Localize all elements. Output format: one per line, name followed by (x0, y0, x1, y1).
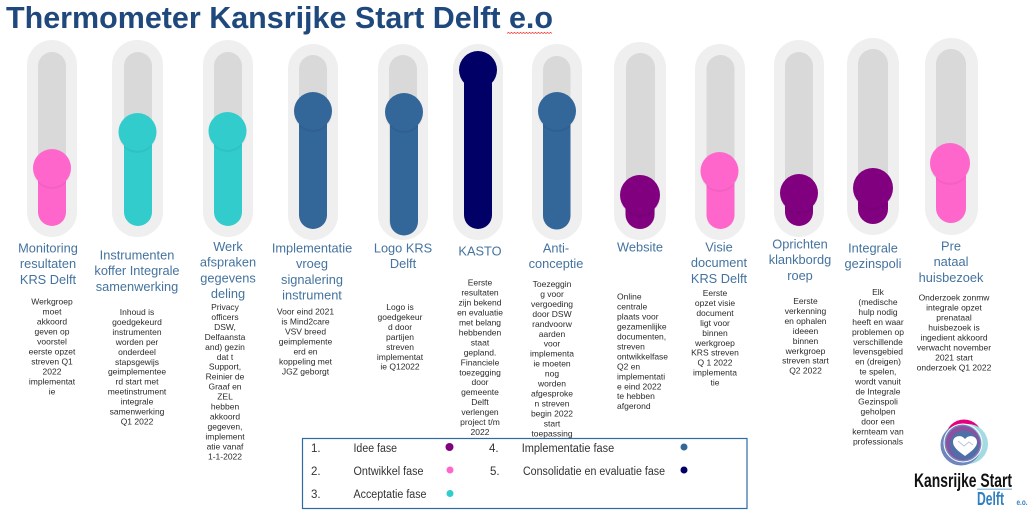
legend row: Ontwikkel fase: 2. (311, 466, 321, 478)
text block: Integrale gezinspoli: Elk (872, 287, 885, 297)
text block: Integrale gezinspoli: de Integrale (856, 386, 901, 396)
text block: Prenataal huisbezoek: prenataal (936, 313, 972, 323)
text block: Website: plaats voor (617, 312, 659, 322)
heading: KASTO: KASTO (458, 244, 502, 258)
thermometer: Prenataal huisbezoek (925, 38, 978, 235)
thermometer: Visie document (695, 44, 745, 240)
text block: KASTO: hebbenden (459, 327, 502, 337)
text block: Implementatie: geimplemente (279, 337, 332, 347)
text block: Monitoring: implementat (29, 376, 76, 386)
text block: Integrale gezinspoli: problemen op (852, 327, 904, 337)
text block: Werkafspraken: hebben (211, 402, 239, 412)
text block: Visie document: implementa (693, 368, 737, 378)
text block: Oprichten klankbordgroep: streven start (782, 356, 830, 366)
text block: Anticonceptie: afgesproke (531, 388, 573, 398)
text block: Anticonceptie: voor (544, 339, 560, 349)
text block: Visie document: opzet visie (695, 298, 735, 308)
heading: Logo KRS Delft: Delft (390, 256, 417, 271)
legend row: Ontwikkel fase (311, 466, 454, 478)
text block: Implementatie: erd en (293, 346, 318, 356)
text block: Logo: ie Q12022 (380, 362, 420, 372)
text block: KASTO: en evaluatie (457, 308, 503, 318)
text block: Werkafspraken: atie vanaf (207, 441, 244, 451)
text block: KASTO: Financiele (461, 357, 500, 367)
text block: Visie document: document (696, 308, 734, 318)
text block: Monitoring: moet (43, 307, 62, 317)
text block: Monitoring: geven op (35, 327, 70, 337)
text block: Werkafspraken: gegeven, (208, 421, 242, 431)
heading: Prenataal huisbezoek: Pre (941, 238, 961, 254)
legend row: Consolidatie en evaluatie fase: Consolidatie en evaluatie fase (523, 466, 665, 478)
text block: Monitoring: voorstel (37, 336, 67, 346)
text block: Anticonceptie: door DSW (532, 309, 572, 319)
text block: KASTO: 2022 (471, 427, 490, 437)
text block: Prenataal huisbezoek: onderzoek Q1 2022 (917, 362, 992, 372)
legend (302, 438, 747, 508)
legend row: Implementatie fase (489, 443, 688, 455)
heading: Anticonceptie: Anti- (543, 240, 569, 256)
text block: Instrumenten koffer: Q1 2022 (121, 416, 154, 426)
text block: Oprichten klankbordgroep: verkenning (785, 306, 827, 316)
text block: Visie document: tie (711, 378, 720, 388)
text block: Integrale gezinspoli: wordt vanuit (854, 377, 902, 387)
text block: Instrumenten koffer: rd start met (116, 377, 159, 387)
text block: Visie document: binnen (702, 328, 728, 338)
text block: Anticonceptie: ie moeten (533, 359, 571, 369)
text block: Instrumenten koffer: instrumenten (112, 327, 162, 337)
heading: Instrumenten koffer Integrale samenwerking: Instrumenten (100, 248, 174, 262)
text block: Visie document: ligt voor (700, 318, 730, 328)
thermometer: Instrumenten koffer (112, 40, 163, 237)
text block: Instrumenten koffer: onderdeel (118, 347, 156, 357)
text block: Prenataal huisbezoek: ingedient akkoord (920, 332, 988, 342)
text block: KASTO: met belang (459, 318, 501, 328)
heading: Visie document KRS Delft: document (691, 255, 748, 270)
text block: KASTO: resultaten (461, 288, 499, 298)
thermometer: Website (614, 42, 666, 240)
text block: KASTO: project t/m (460, 417, 500, 427)
text block: Anticonceptie: vergoeding (531, 299, 573, 309)
text block: Website: Online (617, 292, 642, 302)
text block: Oprichten klankbordgroep: en ophalen (784, 316, 827, 326)
text block: Monitoring: ie (49, 386, 56, 396)
text block: Visie document: werkgroep (694, 338, 735, 348)
heading: Visie document KRS Delft: KRS Delft (691, 271, 748, 286)
heading: Implementatie vroeg signalering instrument: instrument (282, 288, 342, 303)
text block: Monitoring: akkoord (37, 317, 67, 327)
text block: Anticonceptie: implementa (530, 349, 574, 359)
text block: Anticonceptie: start (544, 418, 561, 428)
logo: Kansrijke Start Delft e.o. (914, 420, 1028, 509)
text block: Logo: Logo is (386, 302, 414, 312)
heading: Monitoring resultaten KRS Delft: Monitoring (18, 240, 78, 256)
legend row: Idee fase: Idee fase (354, 443, 397, 455)
text block: Implementatie: is Mind2care (281, 317, 330, 327)
text block: Logo: d door (388, 322, 412, 332)
legend row: Implementatie fase: Implementatie fase (522, 443, 614, 455)
thermometer: Integrale gezinspoli (847, 38, 899, 235)
text block: Prenataal huisbezoek: huisbezoek is (928, 323, 980, 333)
heading: Werkafspraken gegevensdeling: afspraken (200, 255, 256, 270)
heading: Visie document KRS Delft: Visie (705, 240, 733, 254)
text block: Integrale gezinspoli: hulp nodig (858, 307, 898, 317)
text block: KASTO: gemeente (461, 387, 499, 397)
text block: Werkafspraken: dat t (217, 352, 234, 362)
text block: Oprichten klankbordgroep: binnen (793, 336, 819, 346)
legend row: Ontwikkel fase: Ontwikkel fase (354, 466, 424, 478)
thermometer: Implementatie (288, 44, 338, 240)
text block: Anticonceptie: nog (545, 369, 559, 379)
legend row: Consolidatie en evaluatie fase: 5. (490, 466, 500, 478)
text block: Prenataal huisbezoek: 2021 start (935, 352, 974, 362)
text block: Website: documenten, (617, 332, 666, 342)
heading: Website: Website (617, 240, 663, 254)
text block: Anticonceptie: n streven (535, 398, 570, 408)
text block: Oprichten klankbordgroep: werkgroep (785, 346, 826, 356)
text block: Instrumenten koffer: Inhoud is (120, 307, 154, 317)
text block: Werkafspraken: officers (211, 312, 239, 322)
text block: Anticonceptie: Toezeggin (533, 279, 572, 289)
legend row: Implementatie fase: 4. (489, 443, 499, 455)
heading: Instrumenten koffer Integrale samenwerking: samenwerking (96, 279, 178, 294)
thermometer: KASTO (453, 44, 503, 240)
legend row: Acceptatie fase: Acceptatie fase (354, 489, 426, 501)
text block: Website: centrale (617, 302, 648, 312)
text block: Integrale gezinspoli: te spelen, (860, 367, 896, 377)
text block: Werkafspraken: Delfaansta (205, 332, 246, 342)
text block: Werkafspraken: Graaf en (208, 382, 242, 392)
legend row: Idee fase (311, 443, 454, 455)
heading: Prenataal huisbezoek: nataal (934, 254, 968, 269)
text block: Integrale gezinspoli: en (dreigen) (855, 357, 901, 367)
text block: Website: Q2 en (617, 361, 640, 371)
text block: Website: e eind 2022 (617, 381, 662, 391)
text block: KASTO: staat (471, 337, 490, 347)
text block: Integrale gezinspoli: heeft en waar (852, 317, 904, 327)
text block: Oprichten klankbordgroep: ideeen (793, 326, 819, 336)
text block: Monitoring: 2022 (43, 366, 62, 376)
text block: Instrumenten koffer: integrale (121, 397, 154, 407)
heading: Monitoring resultaten KRS Delft: KRS Delft (20, 272, 77, 287)
text block: KASTO: verlengen (461, 407, 499, 417)
text block: Visie document: Eerste (703, 288, 728, 298)
text block: Oprichten klankbordgroep: Q2 2022 (789, 366, 822, 376)
text block: Prenataal huisbezoek: integrale opzet (926, 303, 983, 313)
heading: Oprichten klankbordgroep: Oprichten (772, 236, 828, 252)
heading: Werkafspraken gegevensdeling: deling (211, 286, 245, 301)
text block: Integrale gezinspoli: (medische (858, 297, 898, 307)
text block: KASTO: Delft (471, 397, 489, 407)
legend row: Acceptatie fase: 3. (311, 489, 321, 501)
heading: Logo KRS Delft: Logo KRS (374, 240, 432, 256)
text block: Anticonceptie: toepassing (531, 428, 573, 438)
text block: Werkafspraken: ZEL (217, 392, 233, 402)
text block: Monitoring: streven Q1 (31, 356, 73, 366)
text block: Integrale gezinspoli: geholpen (861, 406, 896, 416)
text block: Werkafspraken: 1-1-2022 (208, 451, 242, 461)
text block: Werkafspraken: DSW, (214, 322, 236, 332)
text block: Website: afgerond (617, 401, 651, 411)
text block: Prenataal huisbezoek: Onderzoek zonmw (919, 293, 990, 303)
heading: Integrale gezinspoli: gezinspoli (845, 256, 901, 271)
heading: Oprichten klankbordgroep: roep (787, 268, 813, 283)
text block: Anticonceptie: begin 2022 (531, 408, 573, 418)
text block: Integrale gezinspoli: door een (861, 416, 895, 426)
thermometer: Logo KRS Delft (378, 44, 428, 240)
text block: Logo: implementat (377, 352, 424, 362)
text block: Anticonceptie: g voor (540, 289, 564, 299)
text block: Werkafspraken: implement (205, 431, 245, 441)
text block: Visie document: KRS streven (691, 348, 739, 358)
text block: KASTO: gepland. (464, 347, 496, 357)
text block: Werkafspraken: Reinier de (206, 372, 245, 382)
text block: Logo: goedgekeur (378, 312, 423, 322)
text block: Instrumenten koffer: samenwerking (110, 406, 165, 416)
text block: Instrumenten koffer: meetinstrument (108, 387, 167, 397)
text block: KASTO: toezegging (459, 367, 501, 377)
text block: Implementatie: JGZ geborgt (282, 366, 330, 376)
text block: Website: ontwikkelfase (617, 351, 668, 361)
legend row: Idee fase: 1. (311, 443, 321, 455)
text block: Instrumenten koffer: goedgekeurd (112, 317, 162, 327)
heading: Prenataal huisbezoek: huisbezoek (919, 270, 984, 285)
heading: Oprichten klankbordgroep: klankbordg (769, 252, 831, 267)
thermometer: Oprichten klankbordgroep (774, 40, 824, 237)
text block: Integrale gezinspoli: verschillende (853, 337, 903, 347)
text block: KASTO: door (471, 377, 489, 387)
thermometer: Werkafspraken (203, 40, 253, 237)
heading: Werkafspraken gegevensdeling: gegevens (200, 270, 256, 285)
text block: KASTO: Eerste (468, 278, 493, 288)
text block: Anticonceptie: worden (537, 378, 566, 388)
heading: Implementatie vroeg signalering instrument: Implementatie (272, 240, 352, 256)
heading: Implementatie vroeg signalering instrument: vroeg (296, 256, 328, 271)
heading: Integrale gezinspoli: Integrale (848, 240, 898, 256)
text block: Werkafspraken: Support, (209, 362, 241, 372)
text block: Anticonceptie: randvoorw (532, 319, 573, 329)
text block: Integrale gezinspoli: kernteam van (852, 426, 904, 436)
text block: Website: streven (617, 341, 645, 351)
heading: Werkafspraken gegevensdeling: Werk (213, 239, 243, 254)
text block: Implementatie: Voor eind 2021 (277, 307, 334, 317)
text block: Website: implementati (617, 371, 665, 381)
text block: Werkafspraken: and) gezin (205, 342, 245, 352)
heading: Anticonceptie: conceptie (529, 256, 583, 271)
logo: Kansrijke Start Delft e.o.: Delft (977, 489, 1004, 509)
text block: Monitoring: Werkgroep (31, 297, 73, 307)
thermometer: Anticonceptie (532, 44, 582, 240)
text block: Website: gezamenlijke (617, 322, 667, 332)
text block: Website: te hebben (617, 391, 655, 401)
text block: Werkafspraken: akkoord (210, 411, 240, 421)
heading: Monitoring resultaten KRS Delft: resultaten (20, 256, 76, 271)
thermometer: Monitoring resultaten (27, 40, 77, 237)
text block: Monitoring: eerste opzet (29, 346, 76, 356)
legend row: Acceptatie fase (311, 489, 454, 501)
text block: Prenataal huisbezoek: verwacht november (917, 342, 991, 352)
text block: Implementatie: koppeling met (279, 356, 333, 366)
text block: Integrale gezinspoli: Gezinspoli (858, 396, 898, 406)
heading: Implementatie vroeg signalering instrument: signalering (281, 272, 343, 287)
text block: Implementatie: VSV breed (285, 327, 326, 337)
text block: Visie document: Q 1 2022 (698, 358, 733, 368)
heading: Instrumenten koffer Integrale samenwerking: koffer Integrale (94, 263, 180, 278)
text block: KASTO: zijn bekend (458, 298, 502, 308)
text block: Integrale gezinspoli: levensgebied (853, 347, 903, 357)
text block: Integrale gezinspoli: professionals (853, 436, 903, 446)
text block: Anticonceptie: aarden (539, 329, 566, 339)
text block: Oprichten klankbordgroep: Eerste (793, 296, 818, 306)
icon: heart in circles (940, 420, 988, 466)
text block: Instrumenten koffer: geimplementee (108, 367, 166, 377)
text block: Werkafspraken: Privacy (211, 302, 240, 312)
text block: Logo: streven (386, 342, 414, 352)
text block: Instrumenten koffer: worden per (115, 337, 158, 347)
text block: Logo: partijen (386, 332, 414, 342)
text block: Instrumenten koffer: stapsgewijs (115, 357, 159, 367)
title: Thermometer Kansrijke Start Delft e.o (6, 0, 553, 35)
